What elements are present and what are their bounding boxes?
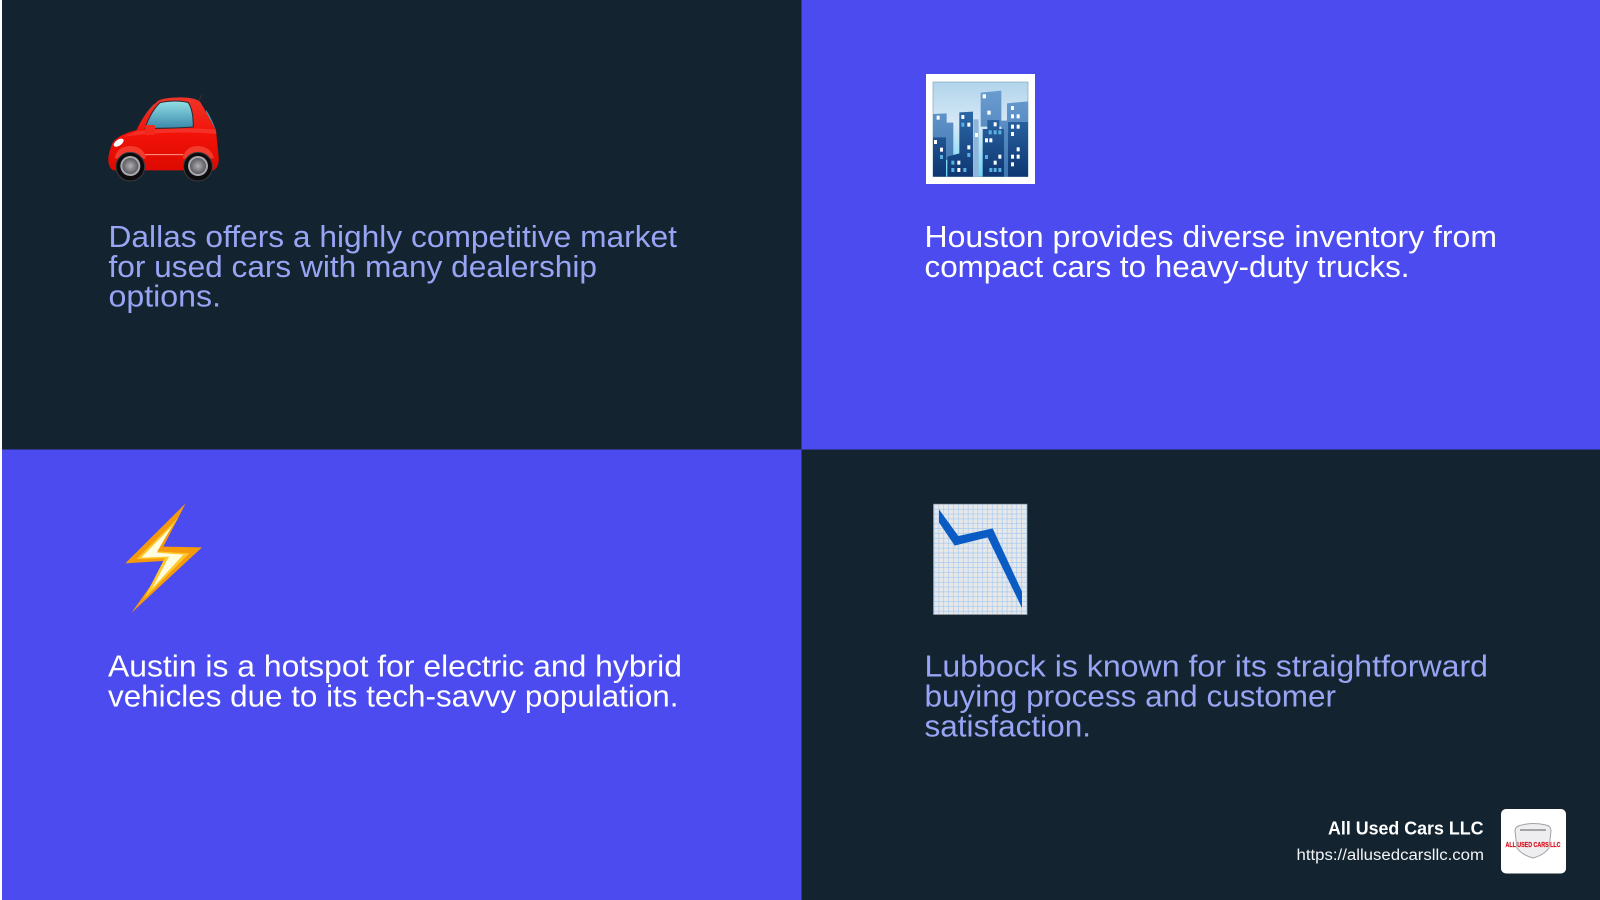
text: Lubbock: satisfaction. [924,710,1091,744]
text: Houston: Houston provides diverse inventory from [924,220,1497,254]
icon: red car [108,94,219,181]
logo [1501,809,1566,874]
brand url: https://allusedcarsllc.com [1296,847,1484,864]
text: Lubbock: buying process and customer [924,680,1336,714]
panel: Lubbock [802,450,1600,900]
logo: ALL USED CARS LLC [1506,840,1561,849]
text: Dallas [108,220,678,314]
panel: Austin [2,450,802,900]
text: Dallas: for used cars with many dealership [108,250,597,284]
text: Austin: Austin is a hotspot for electric and hybrid [108,650,682,684]
panel: Dallas [2,0,802,450]
text: Houston: compact cars to heavy-duty trucks. [924,250,1410,284]
text: Dallas: options. [108,280,221,314]
text: Lubbock [924,650,1488,744]
icon: declining chart [933,504,1027,615]
icon: cityscape [926,74,1035,184]
text: Lubbock: Lubbock is known for its straightforward [924,650,1488,684]
brand footer [1296,809,1566,874]
text: Houston [924,220,1497,284]
icon: lightning bolt [125,503,202,613]
text: Austin: vehicles due to its tech-savvy population. [108,680,678,714]
panel: Houston [802,0,1600,450]
text: Austin [108,650,682,714]
text: Dallas: Dallas offers a highly competitive market [108,220,678,254]
brand name: All Used Cars LLC [1328,818,1484,838]
